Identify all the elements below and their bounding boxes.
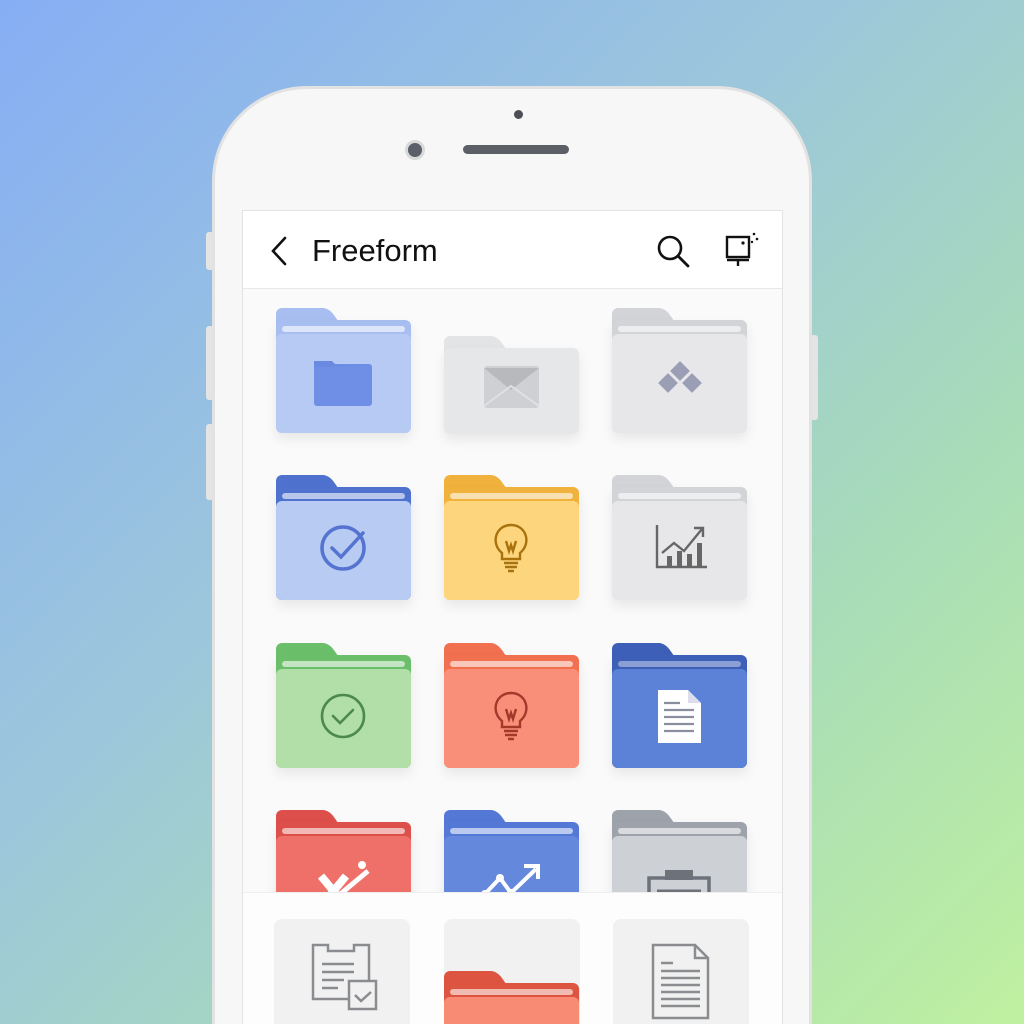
tile: red folder: [444, 919, 580, 1024]
folder: diamonds gray: [611, 308, 748, 440]
folder: trend blue: [443, 810, 580, 892]
board icon: [726, 232, 758, 266]
search icon: [658, 236, 690, 268]
header bar: [243, 211, 784, 289]
folder: bulb yellow: [443, 475, 580, 607]
phone body: [212, 86, 812, 1024]
folder: chart gray: [611, 475, 748, 607]
folder: document dark blue: [611, 643, 748, 775]
tile: document: [613, 919, 749, 1024]
back arrow: [271, 236, 286, 266]
speaker: [463, 145, 569, 154]
folder: mail gray: [443, 336, 580, 441]
folder: bulb orange: [443, 643, 580, 775]
folder: check green: [275, 643, 412, 775]
folder: clipboard gray: [611, 810, 748, 892]
title: Freeform: [312, 233, 438, 268]
front camera: [405, 140, 425, 160]
folder: red: [275, 810, 412, 892]
bottom tray: [243, 892, 782, 1024]
folder: blue folder: [275, 308, 412, 440]
sensor dot: [514, 110, 523, 119]
tile: clipboard check: [274, 919, 410, 1024]
screen: [242, 210, 783, 1024]
folder: check blue: [275, 475, 412, 607]
